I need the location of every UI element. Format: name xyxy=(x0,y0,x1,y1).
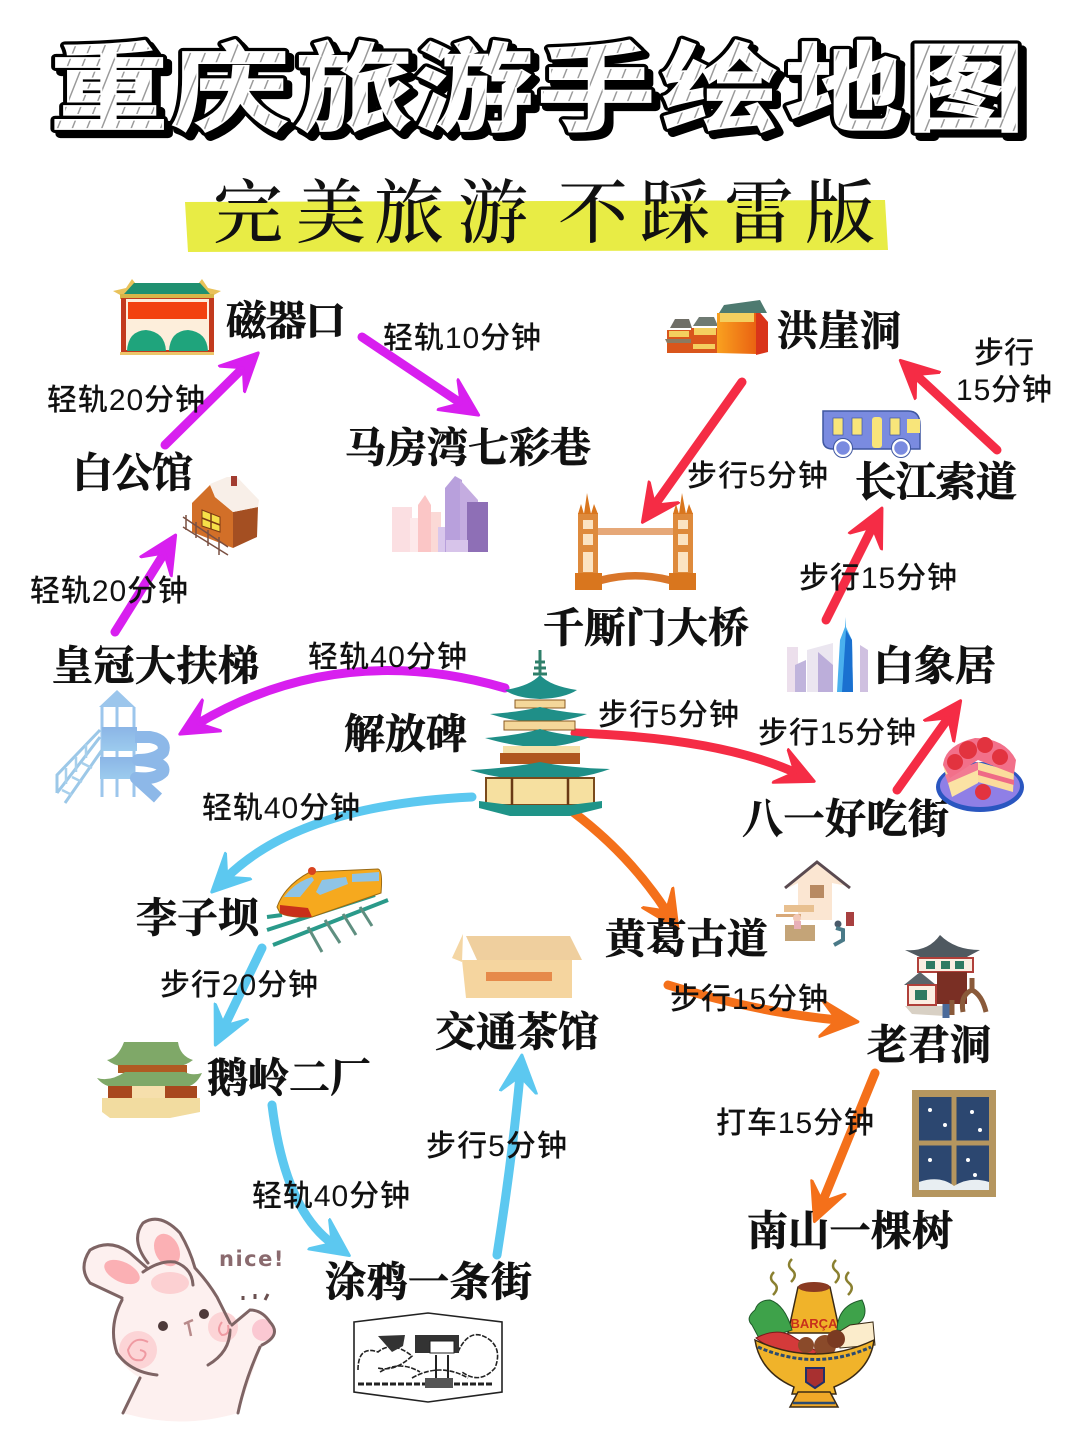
place names: 李子坝 xyxy=(136,895,262,941)
icon: hongyadong buildings xyxy=(665,300,768,355)
icon: hotpot xyxy=(749,1259,875,1407)
icon: cable car bus xyxy=(823,411,920,458)
route time labels: 轻轨40分钟 xyxy=(252,1180,410,1213)
icon: strawberry cake xyxy=(936,737,1024,812)
route time labels: 步行5分钟 xyxy=(426,1130,567,1163)
place names: 皇冠大扶梯 xyxy=(52,643,259,689)
place names: 磁器口 xyxy=(226,298,346,344)
route time labels: 轻轨40分钟 xyxy=(202,792,360,825)
icon: liziba train xyxy=(267,867,388,952)
icon: blue slide xyxy=(57,690,164,803)
route time labels: 步行15分钟 xyxy=(799,562,957,595)
route time labels xyxy=(30,322,1052,1213)
place names: 马房湾七彩巷 xyxy=(345,425,591,471)
place names: 鹅岭二厂 xyxy=(207,1055,371,1101)
icon: ciqikou gate xyxy=(113,279,221,355)
icon: eling pavilion xyxy=(97,1042,202,1118)
place names: 老君洞 xyxy=(867,1022,991,1068)
route time labels: 步行5分钟 xyxy=(687,460,828,493)
route time labels: 轻轨20分钟 xyxy=(47,384,205,417)
icon: tea house xyxy=(452,934,582,998)
route time labels: 轻轨40分钟 xyxy=(308,641,467,674)
place names: 白公馆 xyxy=(72,450,193,496)
icon: graffiti street sketch xyxy=(354,1313,502,1402)
title: 重庆旅游手绘地图 xyxy=(55,40,1030,149)
icon: baigongguan cabin xyxy=(183,476,259,555)
icon: bunny saying nice xyxy=(84,1219,285,1422)
place names xyxy=(52,298,1017,1305)
place names: 南山一棵树 xyxy=(747,1208,953,1254)
place names: 洪崖洞 xyxy=(777,308,901,354)
title: 重庆旅游手绘地图 xyxy=(50,35,1025,144)
place names: 长江索道 xyxy=(855,459,1017,505)
route time labels: 步行15分钟 xyxy=(758,717,916,750)
place names: 黄葛古道 xyxy=(605,916,768,962)
icon: baixiangju towers xyxy=(787,617,868,692)
icon: mafangwan towers xyxy=(392,476,488,552)
icon: hotpot: BARÇA xyxy=(791,1316,838,1331)
place names: 交通茶馆 xyxy=(435,1009,599,1055)
route time labels: 轻轨10分钟 xyxy=(383,322,541,355)
route time labels: 步行5分钟 xyxy=(598,699,739,732)
arrows: routes xyxy=(115,337,997,1255)
place names: 八一好吃街 xyxy=(742,796,949,842)
icon: jiefangbei pagoda xyxy=(470,650,610,816)
place names: 涂鸦一条街 xyxy=(325,1259,532,1305)
route time labels: 步行20分钟 xyxy=(160,969,318,1002)
subtitle with yellow highlight: 完美旅游不踩雷版 xyxy=(213,176,875,253)
route time labels: 轻轨20分钟 xyxy=(30,575,188,608)
icon: night window xyxy=(912,1090,996,1197)
title: 重庆旅游手绘地图 xyxy=(50,35,1025,144)
icon: huangge old house xyxy=(776,862,854,945)
place names: 解放碑 xyxy=(344,711,467,757)
route time labels: 步行15分钟 xyxy=(670,983,828,1016)
place names: 千厮门大桥 xyxy=(543,605,749,651)
icon: qiansimen bridge xyxy=(575,493,696,590)
icon: laojundong temple with horse xyxy=(904,935,986,1018)
route time labels: 打车15分钟 xyxy=(716,1107,874,1140)
place names: 白象居 xyxy=(873,643,996,689)
icon: bunny saying nice: nice! xyxy=(219,1247,285,1271)
route time labels: 步行 xyxy=(974,337,1034,370)
route time labels: 15分钟 xyxy=(956,374,1052,407)
